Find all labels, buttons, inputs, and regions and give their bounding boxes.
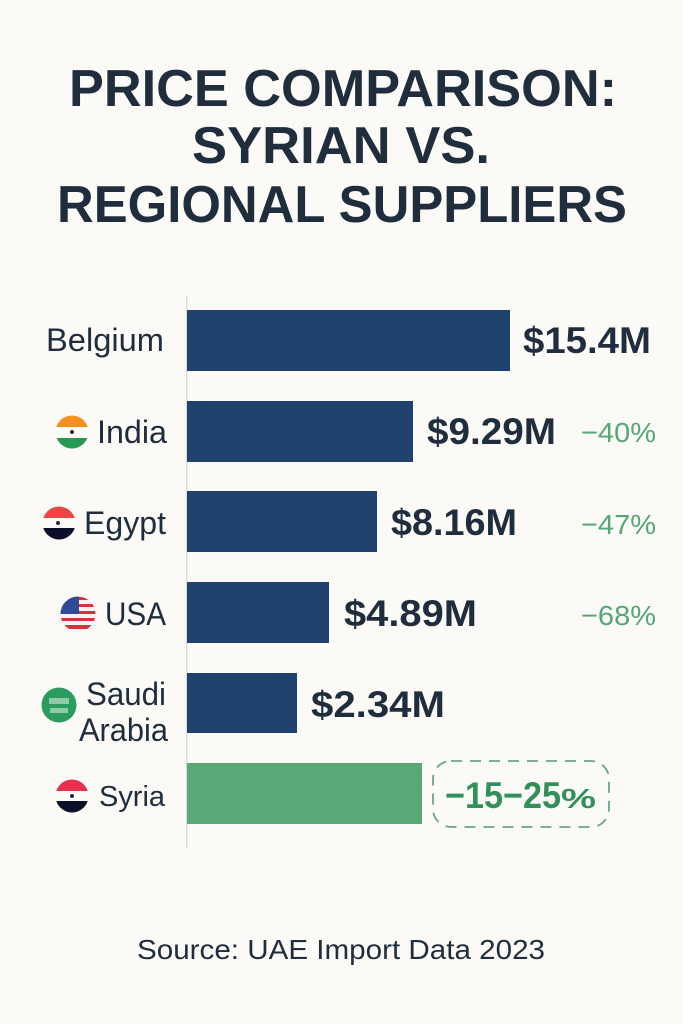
row: Belgium	[46, 310, 651, 371]
title	[57, 60, 627, 234]
row: Egypt: −47%	[581, 509, 656, 540]
callout	[433, 761, 609, 827]
row: Syria	[55, 761, 609, 827]
icon: Saudi Arabia flag	[42, 688, 76, 722]
row: India: $9.29M	[427, 411, 556, 452]
icon: USA flag	[60, 596, 96, 629]
row: USA: USA	[105, 596, 167, 632]
row: Egypt: $8.16M	[391, 502, 517, 543]
icon: Egypt flag	[42, 506, 76, 540]
callout: %	[561, 783, 596, 814]
bar chart	[42, 296, 656, 848]
row: Saudi Arabia: $2.34M	[311, 684, 445, 725]
title: PRICE COMPARISON:	[69, 60, 617, 118]
row: Belgium: $15.4M	[523, 320, 651, 361]
source note: Source: UAE Import Data 2023	[137, 934, 545, 965]
title: REGIONAL SUPPLIERS	[57, 176, 627, 234]
row: Saudi Arabia: Arabia	[79, 712, 168, 748]
title: SYRIAN VS.	[192, 117, 490, 175]
row: USA: $4.89M	[344, 593, 477, 634]
icon: Syria flag	[55, 779, 89, 813]
row: USA	[60, 582, 656, 643]
row: Saudi Arabia	[42, 673, 445, 748]
row: Egypt	[42, 491, 656, 552]
row: Egypt: Egypt	[84, 505, 166, 541]
row: India	[55, 401, 656, 462]
row: Saudi Arabia: Saudi	[86, 676, 166, 712]
callout: −15−25	[445, 775, 561, 816]
icon: India flag	[56, 416, 88, 448]
row: India: −40%	[581, 417, 656, 448]
row: Syria: Syria	[99, 781, 166, 813]
row: USA: −68%	[581, 600, 656, 631]
row: India: India	[97, 414, 167, 450]
row: Belgium: Belgium	[46, 322, 164, 358]
